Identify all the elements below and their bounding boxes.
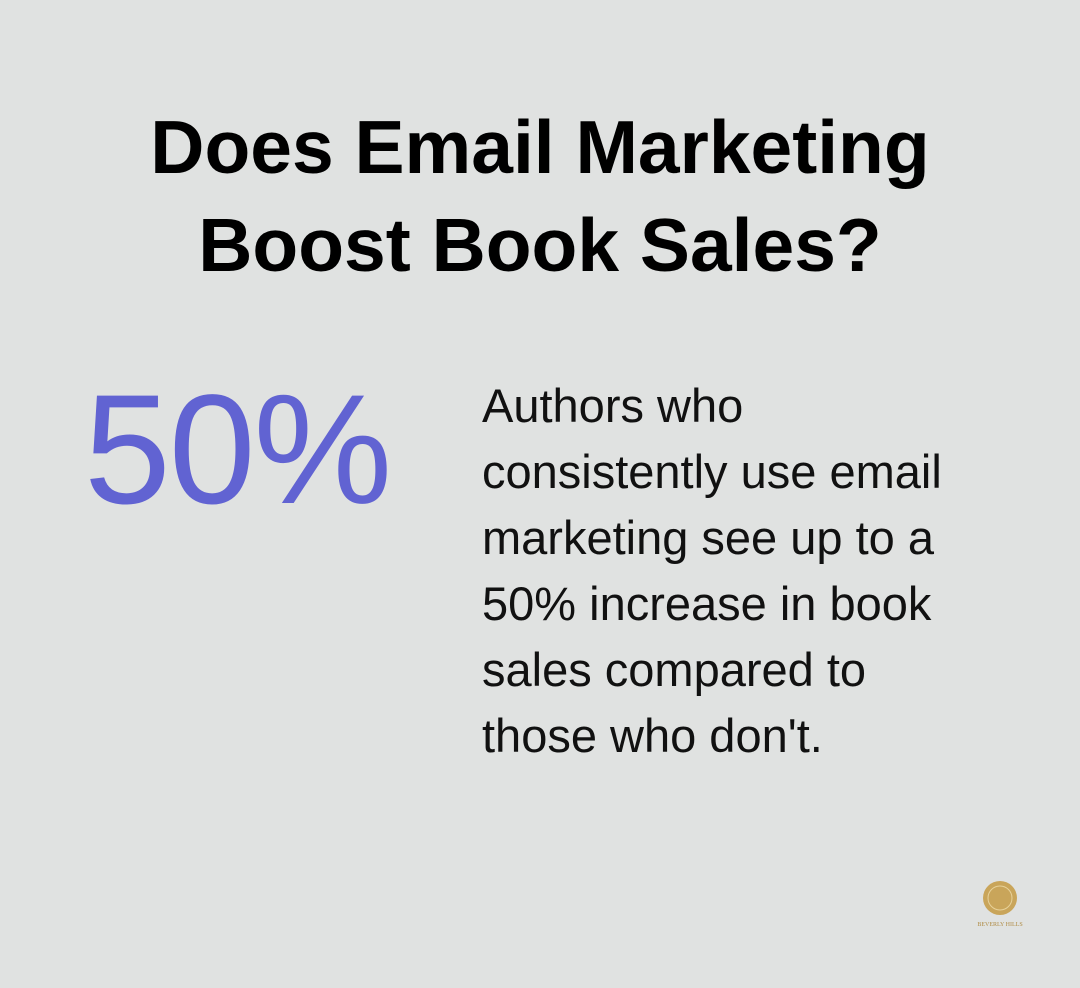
logo: BEVERLY HILLS [977,922,1023,928]
title: Boost Book Sales? [198,203,882,287]
stat description: 50% increase in book [482,577,931,630]
stat description: sales compared to [482,643,866,696]
title: Does Email Marketing [150,105,930,189]
stat description: Authors who [482,379,743,432]
title [150,105,930,287]
logo [977,881,1023,928]
stat description: consistently use email [482,445,942,498]
stat description: marketing see up to a [482,511,934,564]
stat description [482,379,942,762]
stat number: 50% [84,363,390,537]
stat description: those who don't. [482,709,823,762]
